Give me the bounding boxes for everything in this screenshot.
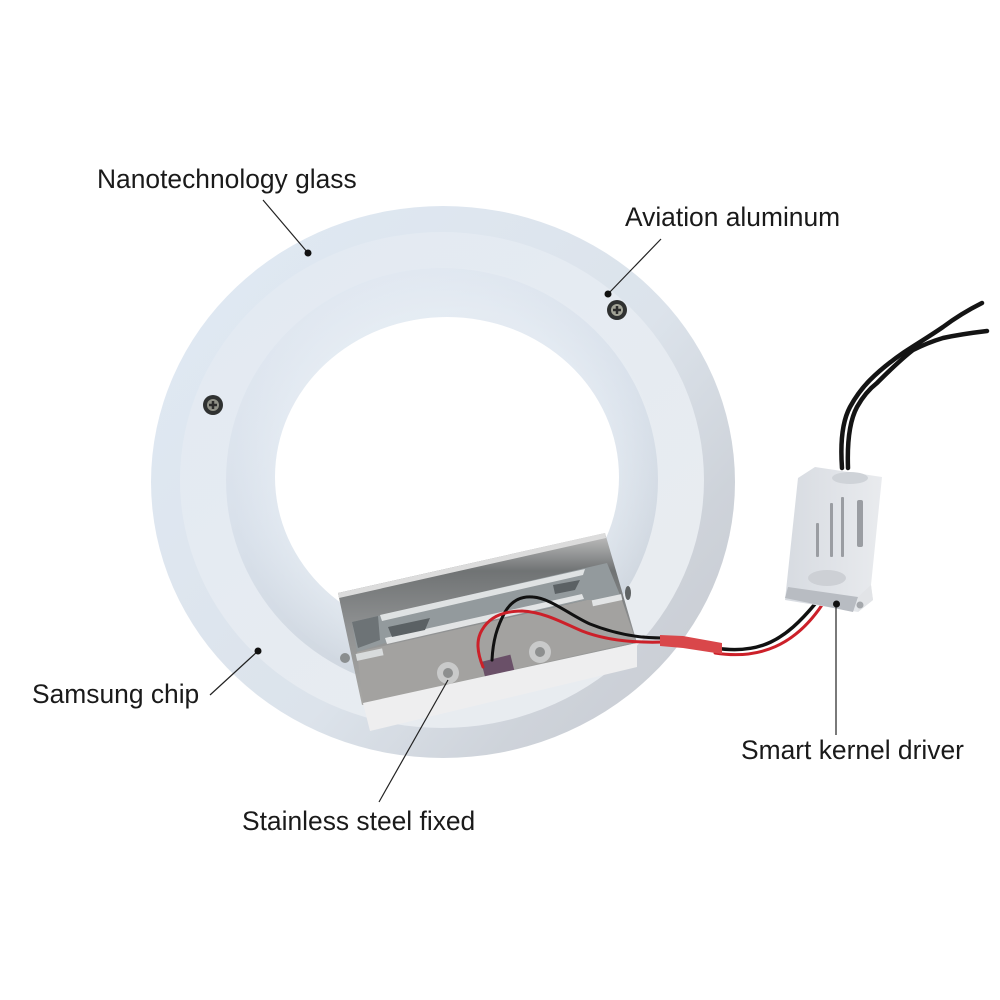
power leads	[841, 303, 987, 468]
label: Samsung chip	[32, 679, 199, 709]
leader line	[835, 606, 837, 735]
leader line	[210, 651, 258, 695]
steel bracket	[338, 533, 637, 731]
bracket inner wall	[338, 533, 637, 705]
marker	[304, 250, 312, 256]
outer glass ring	[151, 206, 735, 758]
callout: Stainless steel fixed	[242, 680, 475, 836]
plate slot highlights	[352, 569, 585, 648]
floor of bracket	[357, 600, 636, 703]
driver oval top	[832, 472, 868, 484]
label: Nanotechnology glass	[97, 164, 357, 194]
leader line	[379, 680, 448, 802]
callout: Aviation aluminum	[604, 202, 840, 298]
lamp body	[151, 206, 735, 758]
inner ring glow	[232, 267, 662, 687]
connector	[481, 655, 514, 678]
bolt: right screw	[592, 586, 631, 606]
label: Smart kernel driver	[741, 735, 964, 765]
bracket front flap	[363, 643, 637, 731]
red wire to driver	[715, 605, 822, 655]
marker	[254, 648, 262, 654]
driver box body	[785, 467, 882, 612]
screw: left	[203, 395, 223, 415]
screw: right	[607, 300, 627, 320]
black wire in bracket	[492, 597, 662, 660]
nut: left	[437, 662, 459, 684]
callout: Nanotechnology glass	[97, 164, 357, 256]
label: Stainless steel fixed	[242, 806, 475, 836]
driver tab hole	[856, 602, 864, 608]
driver box end face	[785, 587, 858, 612]
leader line	[263, 200, 308, 253]
label: Aviation aluminum	[625, 202, 840, 232]
bolt: left screw	[340, 648, 384, 663]
red wire in bracket	[478, 611, 664, 667]
central opening	[275, 317, 619, 637]
wires: red and black from bracket to driver	[478, 597, 822, 667]
lit inner ring	[226, 268, 658, 692]
marker	[604, 290, 612, 298]
black wire to driver	[715, 604, 815, 650]
bracket rim	[338, 533, 606, 598]
driver oval bottom	[808, 570, 846, 586]
callout: Smart kernel driver	[741, 600, 964, 765]
red plug	[660, 635, 722, 654]
leader line	[608, 239, 661, 294]
aluminum middle ring	[180, 232, 704, 728]
callout: Samsung chip	[32, 648, 262, 709]
driver markings	[816, 497, 863, 557]
nut: right	[529, 641, 551, 663]
mounting plate	[352, 563, 622, 652]
driver box	[785, 467, 882, 612]
marker	[833, 600, 840, 608]
driver mounting tab	[858, 585, 873, 612]
